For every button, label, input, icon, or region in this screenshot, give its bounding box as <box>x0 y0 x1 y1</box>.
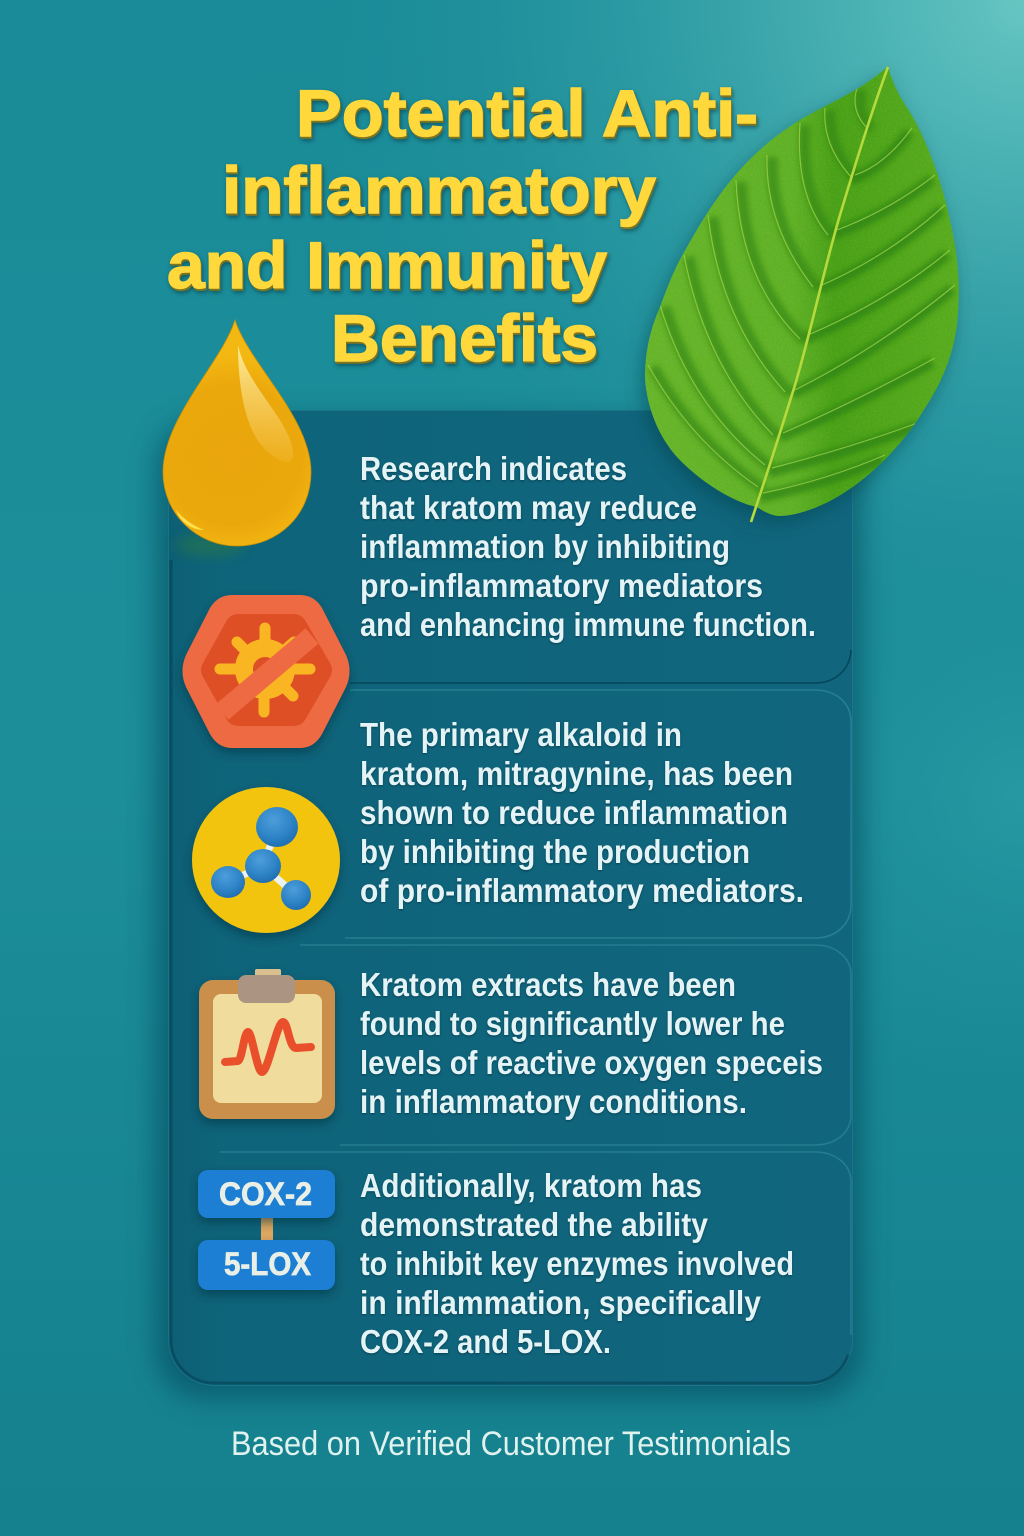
text block: reactive oxygen <box>360 966 823 1120</box>
title: Potential Anti- <box>296 76 758 150</box>
text block: research summary: and enhancing immune function. <box>360 606 816 643</box>
text block: enzymes: COX-2 and 5-LOX. <box>360 1323 611 1360</box>
text block: mitragynine: shown to reduce inflammation <box>360 794 788 831</box>
text block: mitragynine: of pro-inflammatory mediators. <box>360 872 804 909</box>
title: and Immunity <box>167 228 607 302</box>
title: Benefits <box>331 301 598 375</box>
text block: research summary <box>360 450 816 643</box>
text block: enzymes: Additionally, kratom has <box>360 1167 702 1204</box>
panel: benefits list <box>156 410 862 1398</box>
text block: mitragynine: The primary alkaloid in <box>360 716 682 753</box>
text block: research summary: inflammation by inhibiting <box>360 528 730 565</box>
text block: reactive oxygen: in inflammatory conditions. <box>360 1083 747 1120</box>
text block: mitragynine <box>360 716 804 909</box>
icon: inflammation blocked hexagon <box>182 595 350 748</box>
icon: oil drop <box>163 320 311 557</box>
icon: COX-2 and 5-LOX labels: 5-LOX <box>224 1246 312 1282</box>
footer note: Based on Verified Customer Testimonials <box>231 1425 791 1463</box>
icon: COX-2 and 5-LOX labels: COX-2 <box>219 1176 312 1212</box>
text block: mitragynine: by inhibiting the production <box>360 833 750 870</box>
title: inflammatory <box>222 153 656 227</box>
icon: COX-2 and 5-LOX labels <box>198 1170 335 1290</box>
icon: clipboard <box>199 969 335 1119</box>
text block: research summary: that kratom may reduce <box>360 489 697 526</box>
row dividers <box>220 650 851 1335</box>
leaf midrib <box>751 67 888 522</box>
text block: mitragynine: kratom, mitragynine, has been <box>360 755 793 792</box>
gear <box>220 628 310 712</box>
icon: molecule <box>192 787 340 933</box>
text block: reactive oxygen: levels of reactive oxygen speceis <box>360 1044 823 1081</box>
text block: research summary: Research indicates <box>360 450 627 487</box>
icon: leaf <box>640 60 965 525</box>
text block: enzymes <box>360 1167 794 1360</box>
text block: enzymes: in inflammation, specifically <box>360 1284 762 1321</box>
text block: reactive oxygen: Kratom extracts have been <box>360 966 736 1003</box>
text block: reactive oxygen: found to significantly lower he <box>360 1005 785 1042</box>
title <box>167 76 758 375</box>
text block: research summary: pro-inflammatory mediators <box>360 567 763 604</box>
text block: enzymes: to inhibit key enzymes involved <box>360 1245 794 1282</box>
text block: enzymes: demonstrated the ability <box>360 1206 709 1243</box>
